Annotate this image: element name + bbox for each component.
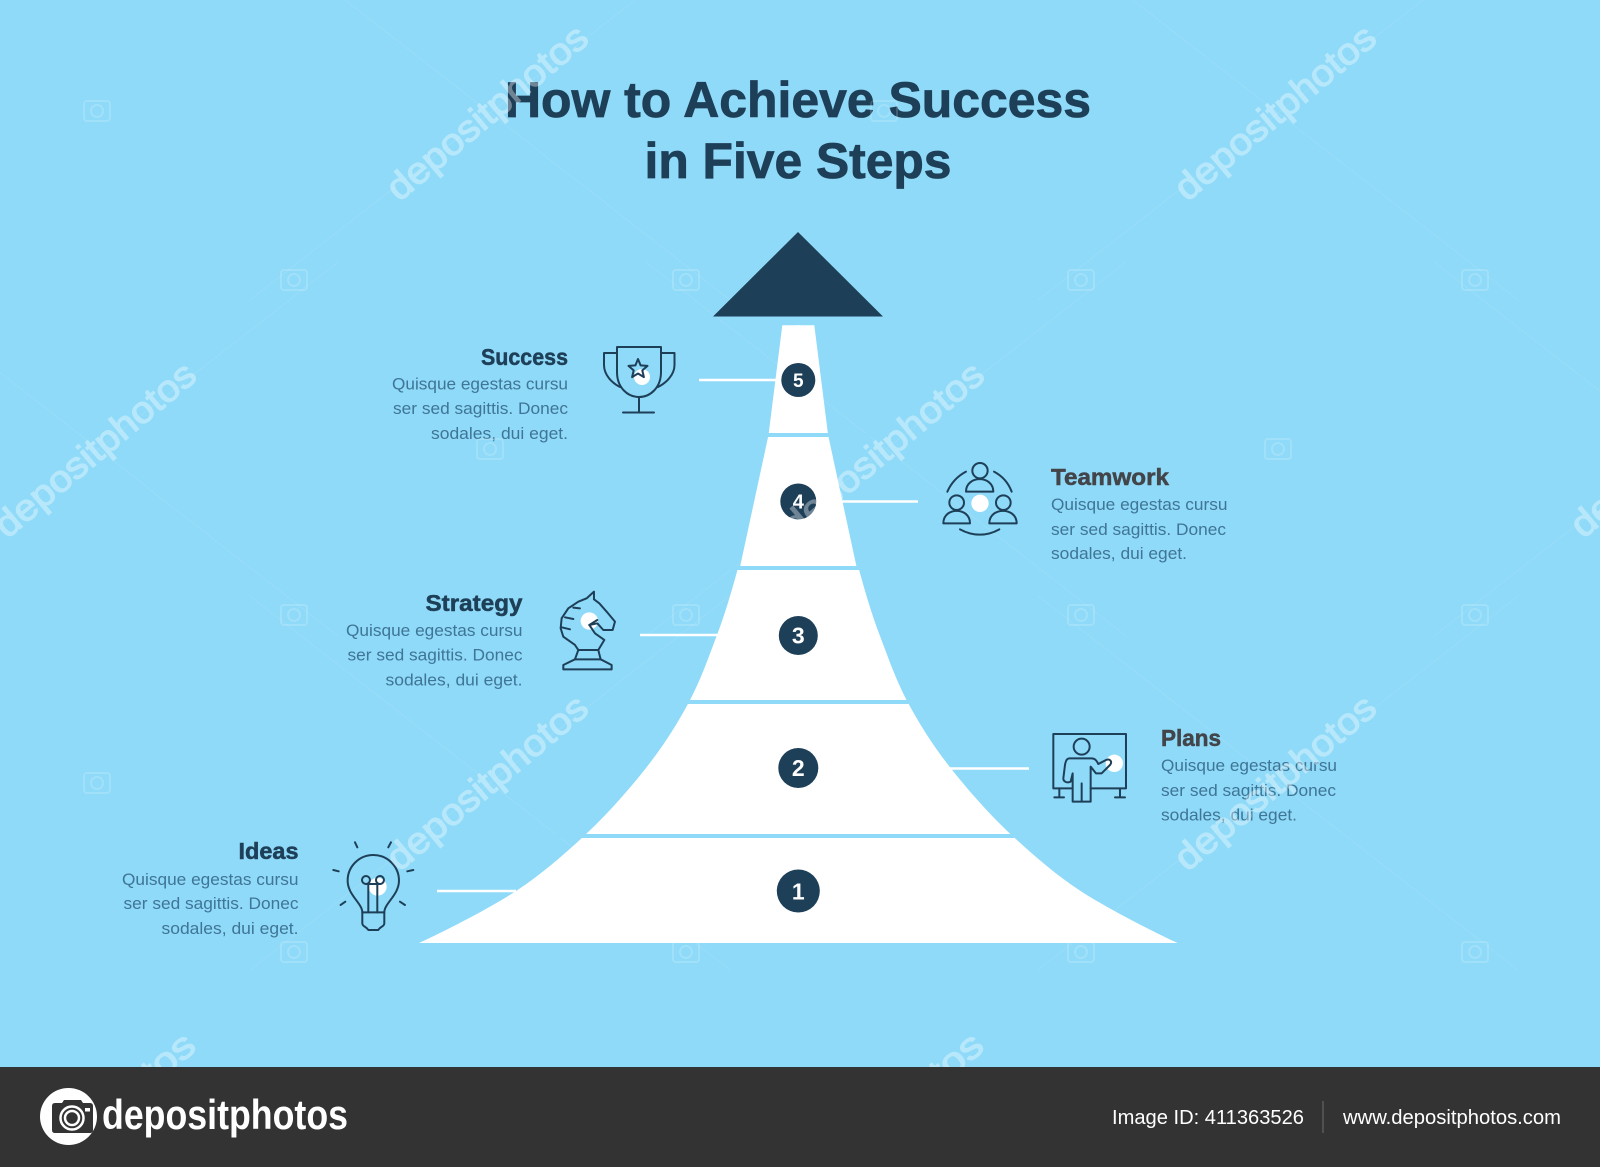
watermark: camera marks <box>84 101 1488 962</box>
step number 2: 2 <box>792 755 805 781</box>
watermark: depositphotos text: depositphotos <box>774 353 992 545</box>
watermark: depositphotos text: depositphotos <box>378 686 596 878</box>
watermark: depositphotos text: tos <box>132 1024 203 1092</box>
text block: Ideas <box>122 838 299 938</box>
text block: Success <box>392 344 569 443</box>
text block: Teamwork: Quisque egestas cursu <box>1051 495 1228 514</box>
text block: Ideas: Quisque egestas cursu <box>122 870 298 889</box>
icon: light bulb <box>333 842 413 930</box>
step number 4: 4 <box>793 492 805 514</box>
footer bar <box>0 1067 1600 1167</box>
text block: Plans: ser sed sagittis. Donec <box>1161 781 1337 800</box>
text block: Teamwork: Teamwork <box>1051 464 1169 490</box>
watermark: depositphotos text: tos <box>920 1024 991 1092</box>
text block: Strategy <box>346 590 523 690</box>
text block: Plans: sodales, dui eget. <box>1161 806 1297 824</box>
step number 3: 3 <box>792 622 805 648</box>
text block: Success: sodales, dui eget. <box>431 424 568 443</box>
title <box>505 72 1091 189</box>
footer image id: Image ID: 411363526 <box>1112 1107 1304 1129</box>
watermark: depositphotos text: depositphotos <box>1166 686 1384 878</box>
step number 5 <box>781 363 815 397</box>
text block: Strategy: ser sed sagittis. Donec <box>348 646 523 664</box>
text block: Strategy: Quisque egestas cursu <box>346 621 522 640</box>
text block: Teamwork <box>1051 464 1228 563</box>
text block: Teamwork: ser sed sagittis. Donec <box>1051 520 1227 539</box>
text block: Plans: Plans <box>1161 725 1221 751</box>
text block: Strategy: sodales, dui eget. <box>386 670 522 690</box>
text block: Success: ser sed sagittis. Donec <box>393 399 569 418</box>
step number 3 <box>779 616 818 655</box>
text block: Success: Quisque egestas cursu <box>392 374 568 394</box>
step number 1 <box>777 870 820 912</box>
title: in Five Steps <box>644 133 952 189</box>
arrow head <box>713 232 883 316</box>
title: How to Achieve Success <box>505 72 1091 128</box>
step number 2 <box>778 748 818 788</box>
icon: presenter at board <box>1053 734 1126 802</box>
step number 5: 5 <box>793 371 804 392</box>
connector lines <box>437 380 1029 891</box>
icon: chess knight <box>561 592 615 669</box>
text block: Teamwork: sodales, dui eget. <box>1051 544 1187 563</box>
footer website: www.depositphotos.com <box>1342 1107 1561 1129</box>
footer logo: depositphotos <box>102 1091 348 1138</box>
text block: Ideas: sodales, dui eget. <box>162 919 298 938</box>
watermark: depositphotos text: depositphotos <box>378 16 596 208</box>
text block: Plans <box>1161 725 1337 824</box>
icon: team <box>943 463 1017 535</box>
watermark: depositphotos text: depositphotos <box>1166 16 1384 208</box>
arrow body: five stacked steps <box>419 325 1178 943</box>
text block: Strategy: Strategy <box>426 590 523 616</box>
text block: Success: Success <box>481 344 568 370</box>
step number 1: 1 <box>792 878 805 904</box>
footer logo <box>40 1088 348 1145</box>
text block: Ideas: ser sed sagittis. Donec <box>124 894 299 913</box>
icon: trophy <box>604 347 674 412</box>
text block: Ideas: Ideas <box>238 838 298 864</box>
text block: Plans: Quisque egestas cursu <box>1161 756 1337 775</box>
step number 4 <box>780 484 816 520</box>
